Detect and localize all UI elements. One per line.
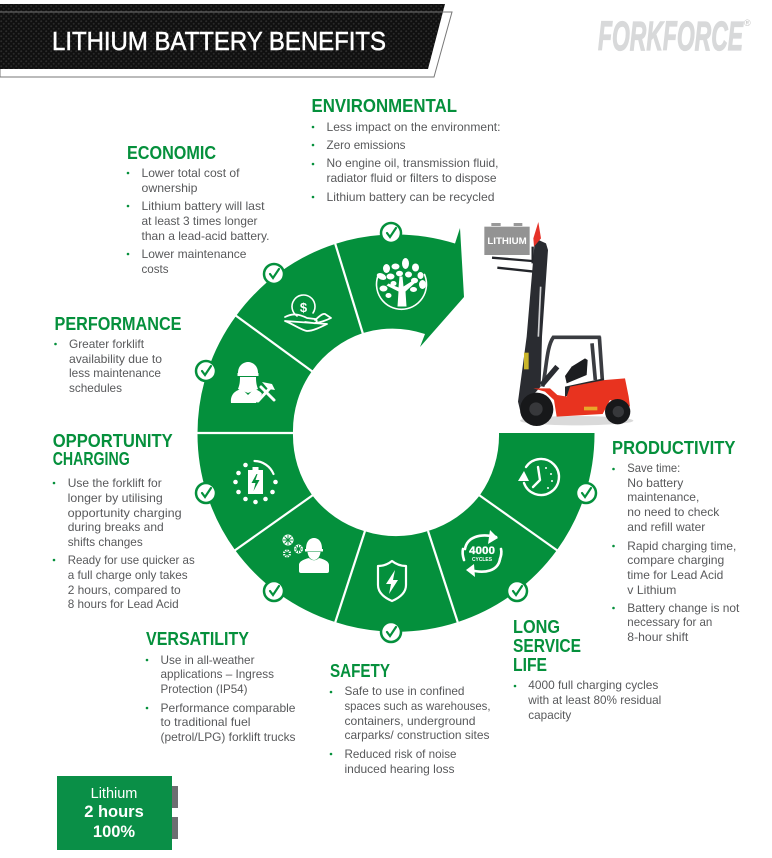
bullet list: costs — [142, 262, 168, 276]
icon: shield with lightning — [378, 561, 406, 601]
callout: lithium charge battery: Lithium — [91, 786, 137, 802]
bullet list: longer by utilising — [68, 491, 163, 505]
icon: tree — [376, 258, 426, 309]
bullet list: shifts changes — [68, 535, 143, 549]
bullet list: Use in all-weather — [160, 653, 254, 667]
bullet list — [330, 684, 490, 776]
bullet list: ownership — [142, 181, 198, 195]
bullet list: Lower maintenance — [142, 247, 247, 261]
text block: long service life: LIFE — [513, 655, 547, 675]
bullet list — [612, 461, 740, 644]
bullet list: availability due to — [69, 352, 162, 366]
bullet list: Greater forklift — [69, 337, 145, 351]
forklift illustration — [484, 222, 633, 426]
bullet list: a full charge only takes — [68, 568, 188, 582]
check mark badges — [196, 223, 596, 642]
bullet list — [312, 120, 500, 204]
text block: versatility — [146, 629, 296, 744]
text block: economic — [127, 143, 270, 276]
segment: long service life — [428, 495, 557, 622]
text block: productivity — [612, 438, 740, 644]
icon: 4000 cycles: 4000 — [469, 545, 495, 557]
icon: hand holding coin — [285, 295, 331, 331]
bullet list: Performance comparable — [160, 701, 296, 715]
bullet list: v Lithium — [627, 583, 676, 597]
text block: opportunity charging — [53, 431, 195, 611]
bullet list: Lower total cost of — [142, 166, 240, 180]
bullet list: and refill water — [627, 520, 705, 534]
bullet list: opportunity charging — [68, 506, 182, 520]
callout: lithium charge battery: 2 hours — [84, 803, 144, 821]
bullet list: at least 3 times longer — [142, 214, 258, 228]
icon: worker with tools — [231, 362, 275, 403]
bullet list: 2 hours, compared to — [68, 583, 181, 597]
callout: lithium charge battery: 100% — [93, 823, 135, 841]
bullet list: to traditional fuel — [160, 715, 250, 729]
forks — [492, 258, 535, 272]
bullet list: compare charging — [627, 553, 724, 567]
bullet list: carparks/ construction sites — [344, 728, 490, 742]
text block: opportunity charging: CHARGING — [53, 449, 130, 469]
icon: 4000 cycles: CYCLES — [472, 557, 492, 563]
text block: safety — [330, 661, 490, 776]
bullet list: capacity — [528, 708, 571, 722]
segment: productivity — [480, 433, 595, 550]
overhead guard — [543, 337, 602, 387]
bullet list: with at least 80% residual — [527, 693, 661, 707]
bullet list: induced hearing loss — [344, 762, 454, 776]
icon: clock with arrow — [518, 459, 559, 495]
bullet list: than a lead-acid battery. — [142, 229, 270, 243]
bullet list: No engine oil, transmission fluid, — [326, 156, 498, 170]
heading: PRODUCTIVITY — [612, 438, 736, 458]
bullet list: Ready for use quicker as — [68, 553, 195, 567]
icon: battery charging ring — [233, 461, 278, 504]
bullet list: Protection (IP54) — [160, 682, 248, 696]
battery badge — [484, 223, 530, 255]
bullet list: 8-hour shift — [627, 630, 689, 644]
text block: performance — [54, 314, 182, 395]
body — [533, 378, 630, 417]
title banner — [0, 4, 452, 77]
segment: safety — [335, 531, 458, 632]
bullet list: spaces such as warehouses, — [344, 699, 490, 713]
heading: VERSATILITY — [146, 629, 249, 649]
bullet list: Battery change is not — [627, 601, 740, 615]
bullet list: Reduced risk of noise — [344, 747, 457, 761]
bullet list: 4000 full charging cycles — [528, 678, 658, 692]
bullet list: less maintenance — [69, 366, 161, 380]
title: LITHIUM BATTERY BENEFITS — [52, 28, 386, 56]
mast — [518, 238, 548, 410]
bullet list: Lithium battery will last — [142, 199, 265, 213]
bullet list — [514, 678, 661, 722]
text block: environmental — [312, 96, 500, 204]
heading: LONG — [513, 617, 560, 637]
bullet list: containers, underground — [344, 714, 476, 728]
bullet list: during breaks and — [68, 520, 164, 534]
callout: lithium charge battery — [57, 776, 178, 850]
bullet list: Use the forklift for — [68, 476, 162, 490]
icon: worker in cold weather — [282, 534, 329, 573]
heading: OPPORTUNITY — [53, 431, 173, 451]
logo: ForkForce: ® — [744, 18, 751, 28]
bullet list: schedules — [69, 381, 122, 395]
battery badge: LITHIUM — [487, 236, 527, 246]
bullet list: 8 hours for Lead Acid — [68, 597, 179, 611]
bullet list: no need to check — [627, 505, 720, 519]
seat — [565, 358, 588, 383]
bullet list — [146, 653, 296, 744]
segment: performance — [198, 316, 312, 433]
heading: ECONOMIC — [127, 143, 216, 163]
heading: PERFORMANCE — [54, 314, 182, 334]
bullet list: necessary for an — [627, 615, 712, 629]
bullet list — [127, 166, 270, 276]
bullet list: Lithium battery can be recycled — [326, 190, 494, 204]
bullet list: Rapid charging time, — [627, 539, 736, 553]
heading: SAFETY — [330, 661, 390, 681]
segment: versatility — [235, 495, 364, 622]
bullet list: time for Lead Acid — [627, 568, 723, 582]
icon: 4000 cycles — [463, 530, 501, 577]
bullet list: maintenance, — [627, 490, 699, 504]
text block: long service life — [513, 617, 661, 722]
text block: long service life: SERVICE — [513, 636, 581, 656]
bullet list: Safe to use in confined — [344, 684, 464, 698]
circular benefits diagram — [196, 223, 596, 642]
bullet list: applications – Ingress — [160, 667, 274, 681]
bullet list: Less impact on the environment: — [326, 120, 500, 134]
bullet list — [53, 476, 195, 611]
segment: environmental arrow — [335, 228, 464, 347]
bullet list: Zero emissions — [326, 138, 406, 152]
icon: hand holding coin: $ — [300, 300, 308, 315]
wheels — [520, 393, 553, 426]
bullet list: No battery — [627, 476, 683, 490]
bullet list: (petrol/LPG) forklift trucks — [160, 730, 296, 744]
segment: opportunity charging — [197, 433, 312, 550]
bullet list — [54, 337, 162, 395]
heading: ENVIRONMENTAL — [312, 96, 457, 116]
segment: economic — [236, 244, 363, 371]
bullet list: radiator fluid or filters to dispose — [326, 171, 497, 185]
bullet list: Save time: — [627, 461, 680, 475]
